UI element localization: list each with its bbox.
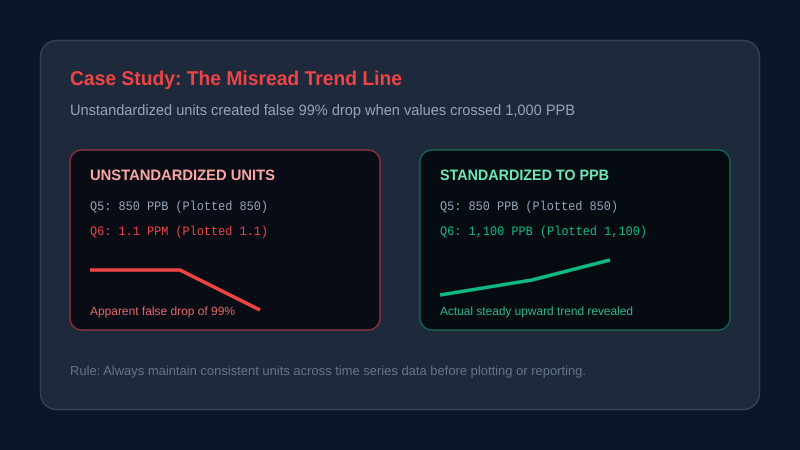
chart caption: Actual steady upward trend revealed xyxy=(440,304,633,318)
panel: standardized to PPB xyxy=(420,150,730,330)
Q5 value: Q5: 850 PPB (Plotted 850) xyxy=(90,199,268,214)
panel heading: STANDARDIZED TO PPB xyxy=(440,167,609,184)
subtitle: Unstandardized units created false 99% drop when values crossed 1,000 PPB xyxy=(70,102,575,119)
title: Case Study: The Misread Trend Line xyxy=(70,68,402,90)
rule footnote: Rule: Always maintain consistent units across time series data before plotting or reporting. xyxy=(70,363,586,378)
line chart: false drop xyxy=(90,270,260,310)
Q6 value: Q6: 1.1 PPM (Plotted 1.1) xyxy=(90,224,268,239)
chart caption: Apparent false drop of 99% xyxy=(90,304,235,318)
panel heading: UNSTANDARDIZED UNITS xyxy=(90,167,275,184)
Q5 value: Q5: 850 PPB (Plotted 850) xyxy=(440,199,618,214)
main card xyxy=(40,40,760,410)
panel: unstandardized units xyxy=(70,150,380,330)
line chart: upward trend xyxy=(440,260,610,295)
Q6 value: Q6: 1,100 PPB (Plotted 1,100) xyxy=(440,224,647,239)
